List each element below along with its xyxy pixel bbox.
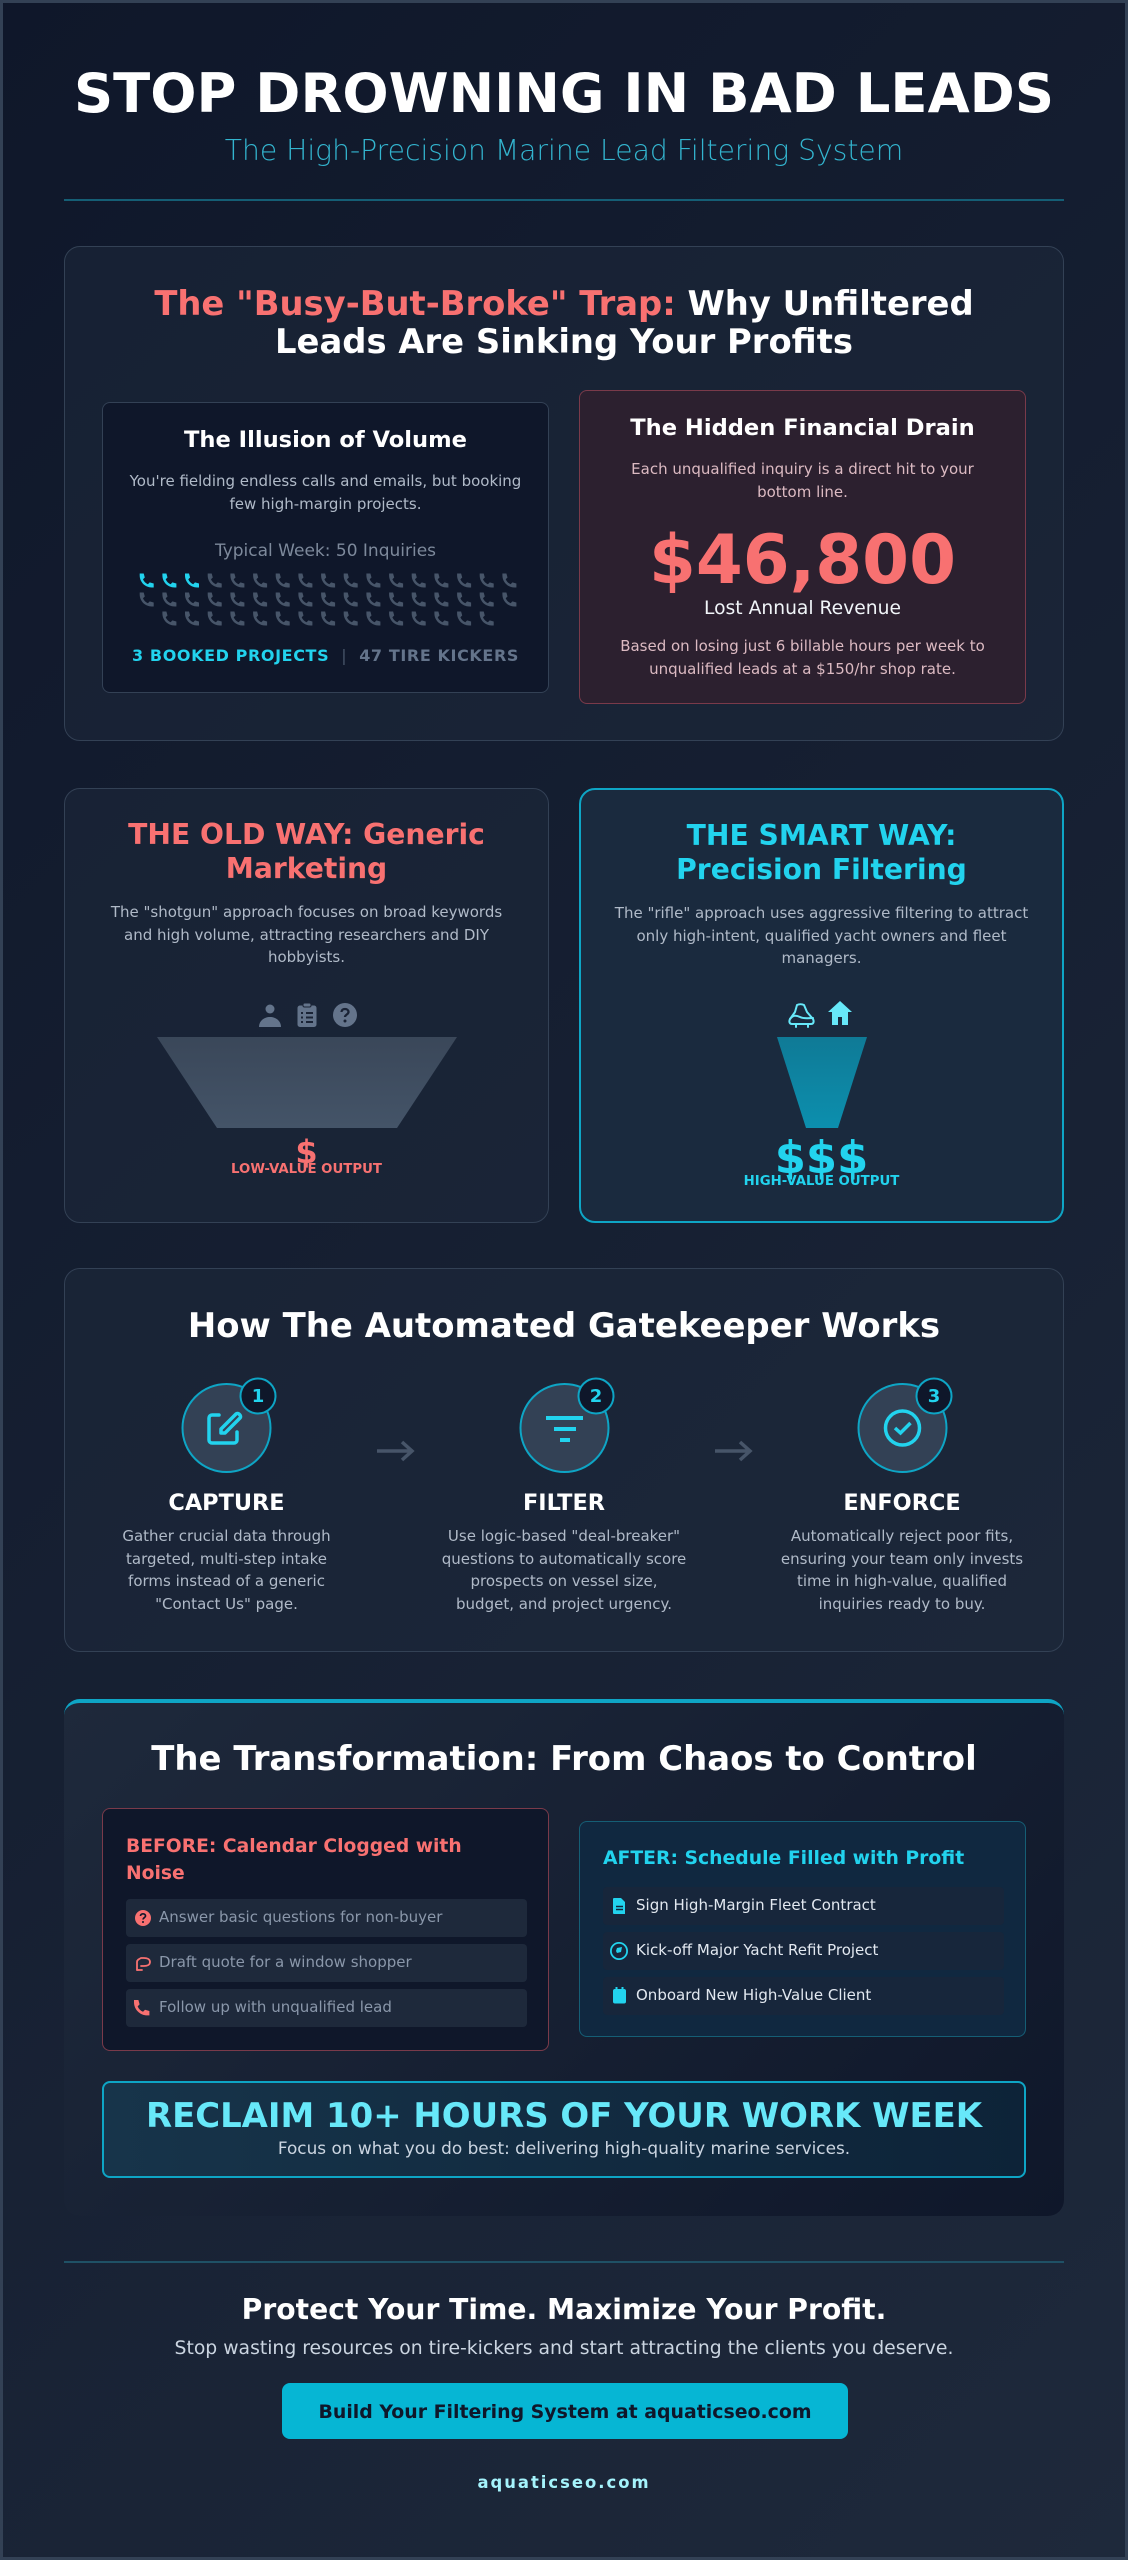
card description: bottom line. (757, 482, 848, 500)
arrow (715, 1440, 752, 1462)
card heading: The Illusion of Volume (184, 427, 467, 453)
panel heading: The "Busy-But-Broke" Trap: Why Unfiltered (154, 284, 974, 323)
card: illusion of volume (102, 402, 549, 693)
item text: Draft quote for a window shopper (159, 1953, 412, 1971)
step title: FILTER (523, 1490, 605, 1516)
step description: inquiries ready to buy. (819, 1594, 985, 1612)
panel: transformation (64, 1699, 1064, 2216)
step description: forms instead of a generic (128, 1572, 325, 1590)
card: hidden financial drain (579, 390, 1026, 704)
step title: ENFORCE (843, 1490, 961, 1516)
icon: quote (136, 1957, 151, 1971)
step description: time in high-value, qualified (797, 1572, 1007, 1590)
output label: HIGH-VALUE OUTPUT (744, 1174, 899, 1189)
item (603, 1977, 1004, 2015)
footer heading: Protect Your Time. Maximize Your Profit. (242, 2293, 886, 2326)
step: enforce (781, 1378, 1023, 1612)
icon: house (828, 1001, 852, 1025)
icon: compass (610, 1942, 628, 1960)
item text: Answer basic questions for non-buyer (159, 1908, 442, 1926)
icon: document (613, 1898, 625, 1914)
card heading (126, 1836, 462, 1884)
button (282, 2383, 848, 2439)
card description (130, 472, 521, 512)
description: The "shotgun" approach focuses on broad keywords (111, 903, 502, 921)
icon: clipboard (298, 1004, 316, 1027)
item (603, 1932, 1004, 1970)
badge (916, 1378, 951, 1414)
footnote: unqualified leads at a $150/hr shop rate. (649, 660, 956, 678)
card: after (579, 1821, 1026, 2037)
panel heading (154, 284, 974, 360)
icon: edit circle: 1 (252, 1386, 264, 1407)
icon: person (259, 1004, 281, 1027)
panel heading: The Transformation: From Chaos to Control (151, 1739, 977, 1778)
step description: Gather crucial data through (122, 1527, 331, 1545)
card heading: BEFORE: Calendar Clogged with (126, 1836, 462, 1857)
icon: edit circle (182, 1378, 276, 1473)
callout headline: RECLAIM 10+ HOURS OF YOUR WORK WEEK (146, 2096, 982, 2134)
description: only high-intent, qualified yacht owners and fleet (636, 926, 1007, 944)
icon: yacht (788, 1003, 815, 1028)
subtitle: The High-Precision Marine Lead Filtering System (225, 134, 903, 167)
panel heading (676, 819, 967, 886)
step description: ensuring your team only invests (781, 1550, 1023, 1568)
arrow (377, 1440, 414, 1462)
big number: $46,800 (649, 520, 956, 599)
stat line: 3 BOOKED PROJECTS | 47 TIRE KICKERS (132, 646, 519, 665)
card heading: Noise (126, 1863, 185, 1884)
panel: busy-but-broke trap (64, 246, 1064, 741)
item (126, 1989, 527, 2027)
step title: CAPTURE (168, 1490, 285, 1516)
panel heading: How The Automated Gatekeeper Works (188, 1306, 940, 1345)
item (603, 1887, 1004, 1925)
step: filter (442, 1378, 686, 1612)
icon: question (135, 1910, 151, 1926)
panel heading: Marketing (226, 852, 387, 885)
icon: phone (134, 2000, 150, 2016)
callout text: Focus on what you do best: delivering high-quality marine services. (278, 2138, 850, 2158)
card description: Each unqualified inquiry is a direct hit to your (631, 460, 974, 478)
step description: prospects on vessel size, (470, 1572, 658, 1590)
panel heading: THE OLD WAY: Generic (128, 818, 485, 851)
dollar output: $ (295, 1133, 318, 1171)
step description: targeted, multi-step intake (126, 1550, 327, 1568)
footer (175, 2293, 953, 2492)
step description: Automatically reject poor fits, (791, 1527, 1013, 1545)
badge (578, 1378, 613, 1414)
step description: questions to automatically score (442, 1550, 686, 1568)
step: capture (122, 1378, 331, 1612)
footnote (620, 637, 985, 678)
card heading: The Hidden Financial Drain (630, 415, 975, 441)
description (614, 904, 1028, 967)
button: Build Your Filtering System at aquaticseo.com (318, 2401, 812, 2423)
icon: calendar (613, 1987, 626, 2004)
dollars output: $$$ (775, 1131, 868, 1184)
description (110, 903, 502, 966)
step description (442, 1527, 686, 1612)
item text: Onboard New High-Value Client (636, 1986, 871, 2004)
step description: "Contact Us" page. (155, 1594, 298, 1612)
funnel (157, 1037, 457, 1128)
card heading: AFTER: Schedule Filled with Profit (603, 1848, 964, 1869)
panel: automated gatekeeper (64, 1268, 1064, 1652)
panel: the smart way (579, 788, 1064, 1223)
card description (631, 460, 974, 500)
item text: Kick-off Major Yacht Refit Project (636, 1941, 878, 1959)
header (74, 62, 1054, 167)
panel heading: Leads Are Sinking Your Profits (275, 322, 853, 360)
description: managers. (781, 949, 862, 967)
inquiries label: Typical Week: 50 Inquiries (215, 541, 436, 561)
badge (240, 1378, 276, 1414)
card description: You're fielding endless calls and emails, but booking (130, 472, 521, 490)
icon: filter circle (520, 1378, 614, 1473)
card: before (102, 1808, 549, 2051)
website: aquaticseo.com (477, 2473, 651, 2492)
description: hobbyists. (268, 948, 345, 966)
step description: budget, and project urgency. (456, 1594, 672, 1612)
number caption: Lost Annual Revenue (704, 598, 901, 619)
card description: few high-margin projects. (230, 494, 421, 512)
panel heading (128, 818, 485, 885)
icon: check circle: 3 (927, 1386, 940, 1407)
panel: the old way (64, 788, 549, 1223)
panel heading: Precision Filtering (676, 853, 967, 886)
funnel (777, 1037, 867, 1128)
footer text: Stop wasting resources on tire-kickers and start attracting the clients you deserve. (175, 2338, 953, 2359)
step description (781, 1527, 1023, 1612)
item (126, 1899, 527, 1937)
item text: Sign High-Margin Fleet Contract (636, 1896, 876, 1914)
footnote: Based on losing just 6 billable hours per week to (620, 637, 985, 655)
icon: question (333, 1003, 357, 1027)
step description: Use logic-based "deal-breaker" (448, 1527, 680, 1545)
panel heading: THE SMART WAY: (687, 819, 956, 852)
icon: filter circle: 2 (589, 1386, 602, 1407)
item (126, 1944, 527, 1982)
callout: reclaim hours (102, 2081, 1026, 2178)
output label: LOW-VALUE OUTPUT (231, 1162, 382, 1177)
step description (122, 1527, 331, 1612)
icon: check circle (858, 1378, 952, 1473)
item text: Follow up with unqualified lead (159, 1998, 392, 2016)
description: and high volume, attracting researchers and DIY (124, 926, 489, 944)
description: The "rifle" approach uses aggressive filtering to attract (615, 904, 1028, 922)
title: STOP DROWNING IN BAD LEADS (74, 62, 1054, 125)
